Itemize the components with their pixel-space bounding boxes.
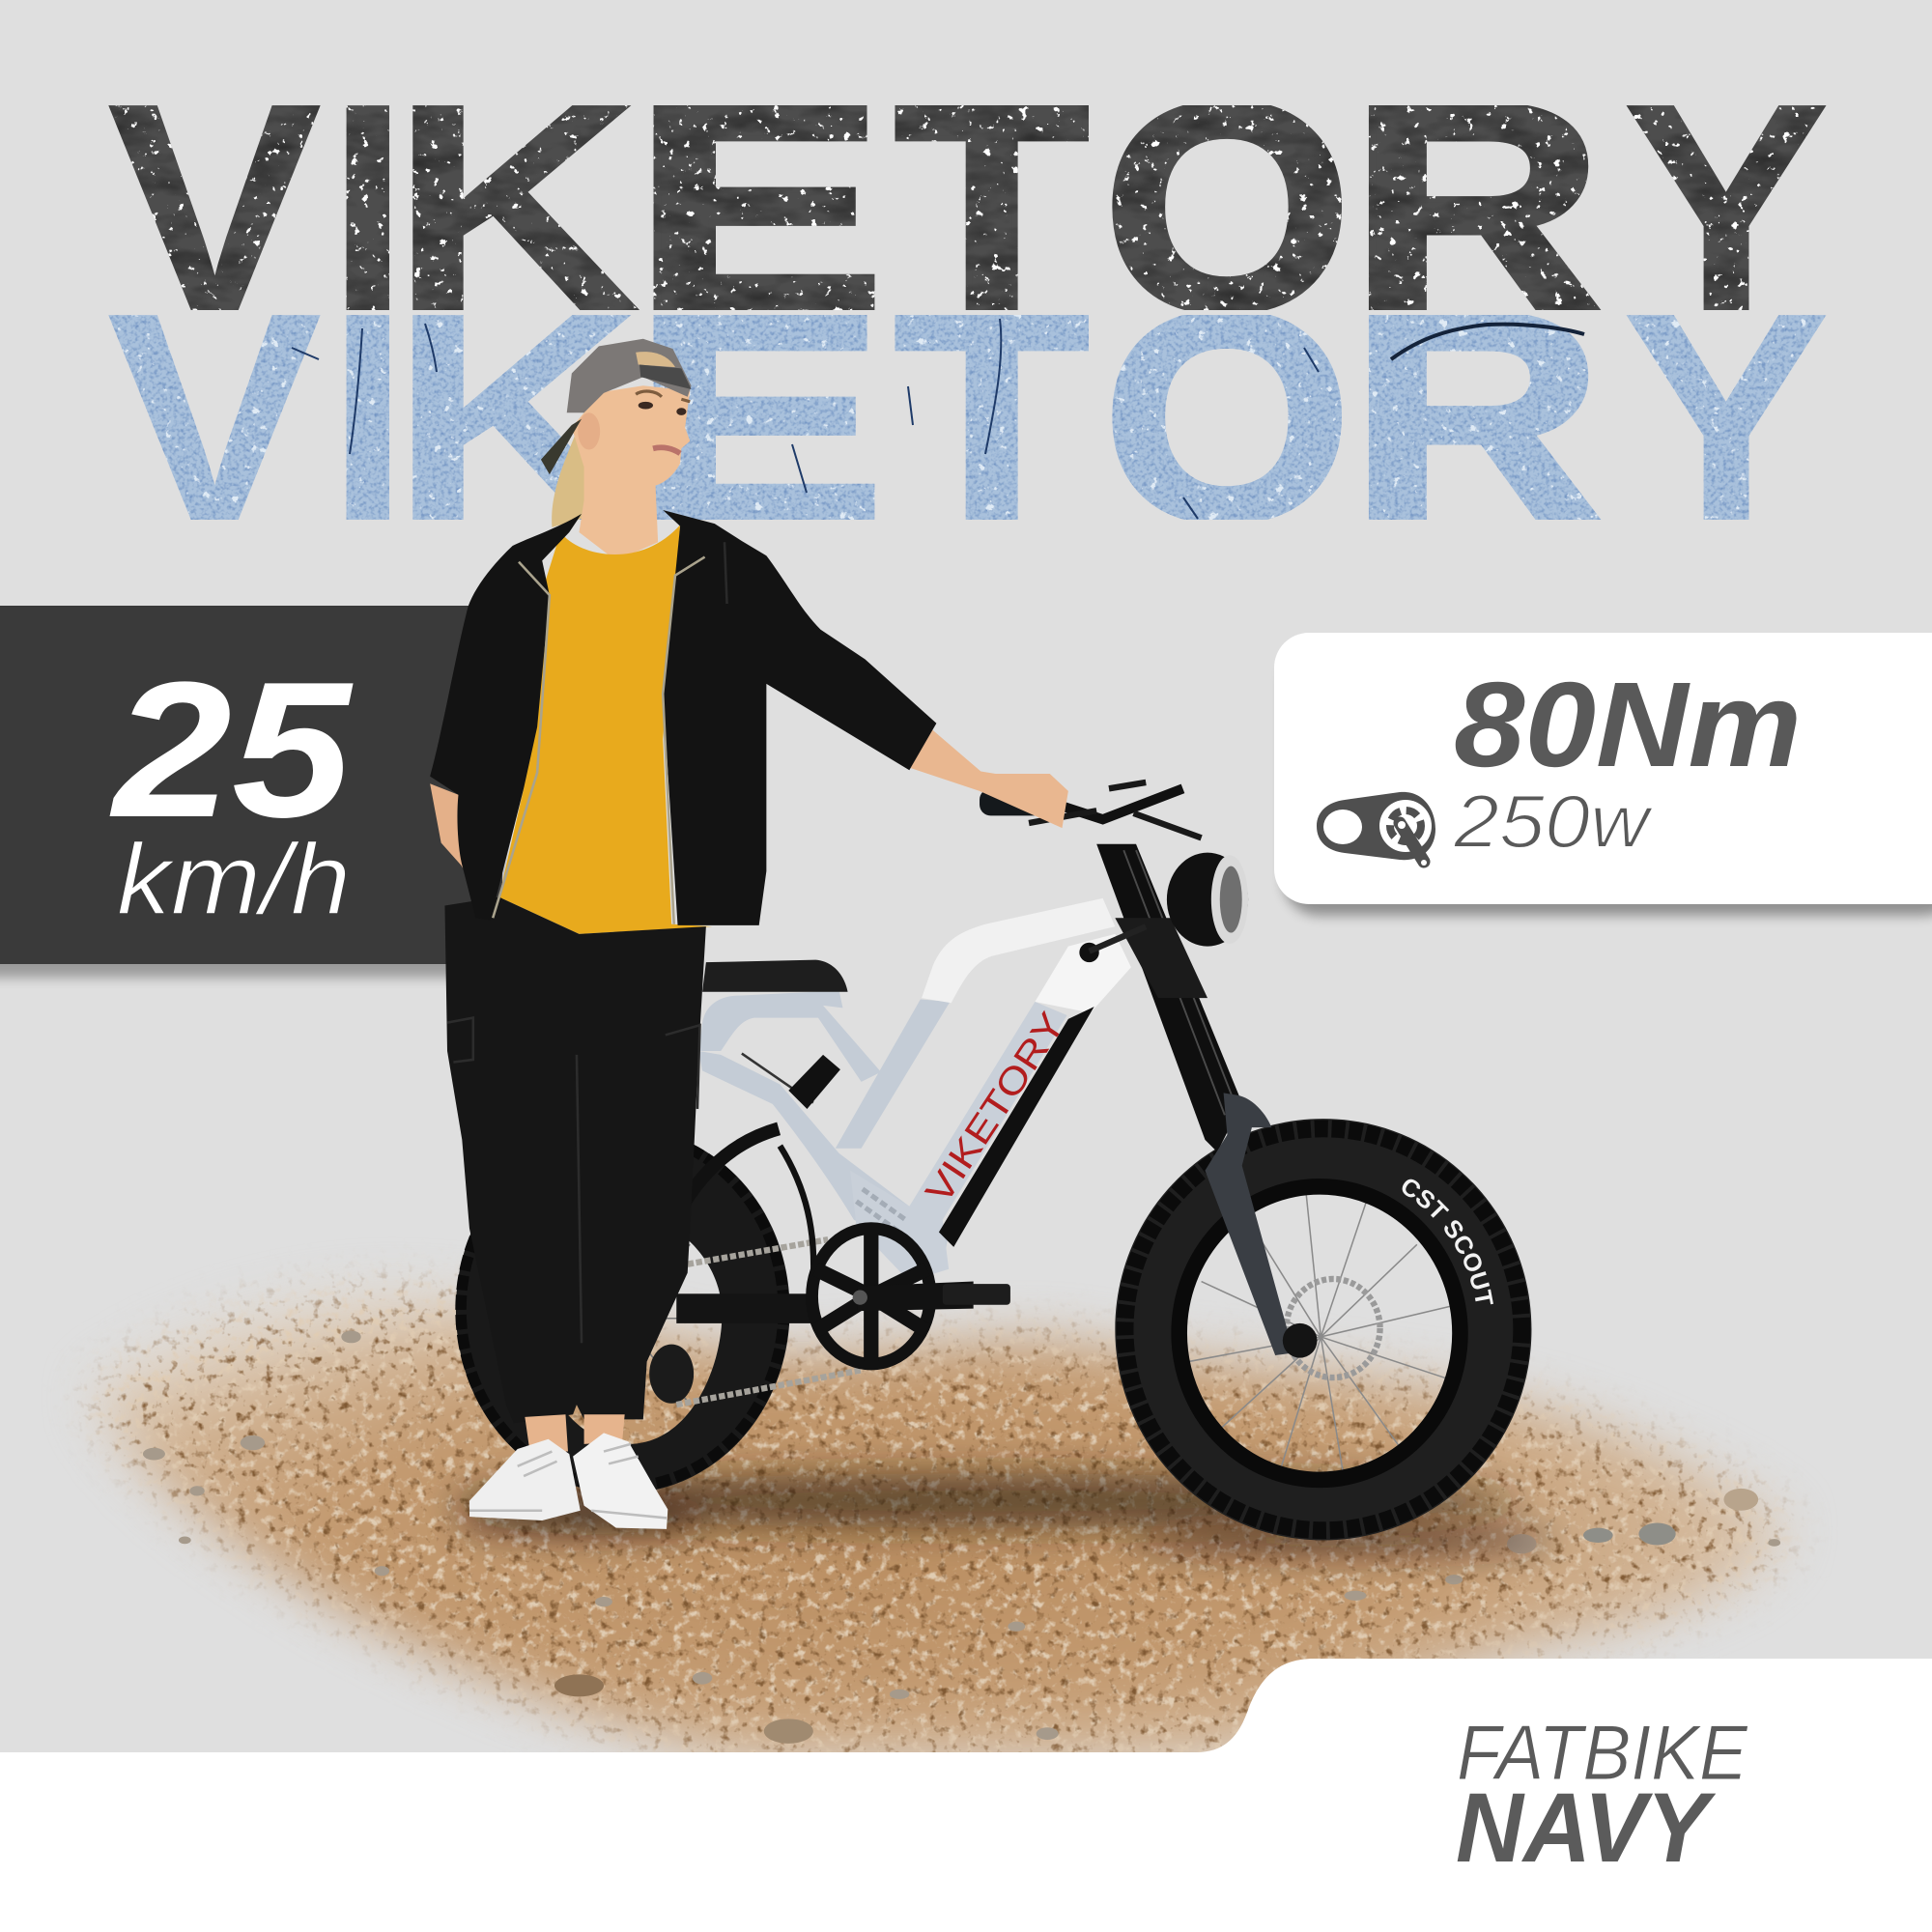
- left shoe: [469, 1439, 581, 1520]
- forearm and hand: [909, 727, 1068, 828]
- title: dark distressed wordmark: V: [106, 42, 325, 374]
- title: dark distressed wordmark: I: [327, 42, 410, 374]
- cap: [567, 339, 692, 412]
- title: dark distressed wordmark: Q: [1102, 41, 1352, 373]
- hand in pocket: [430, 783, 472, 882]
- title: dark distressed wordmark: R: [1349, 42, 1605, 374]
- saddle: [702, 960, 848, 992]
- trousers: [444, 897, 706, 1423]
- bike: handlebar: [980, 782, 1202, 838]
- title: dark distressed wordmark: T: [895, 41, 1089, 374]
- spokes: [1189, 1193, 1452, 1472]
- title: blue cracked wordmark: [108, 315, 1826, 520]
- title: blue cracked wordmark: Q: [1102, 250, 1352, 582]
- frame lower section: [698, 1051, 949, 1267]
- tyre lettering: [1399, 1190, 1477, 1314]
- title: blue cracked wordmark: E: [632, 250, 886, 582]
- speed unit: km/h: [117, 824, 351, 936]
- jacket right panel: [663, 510, 936, 925]
- ponytail: [552, 425, 594, 527]
- bike: chainring and crank: [676, 1229, 1010, 1364]
- title: dark distressed wordmark: Y: [1621, 42, 1832, 374]
- bike: frame: [698, 898, 1131, 1282]
- brake disc: [1287, 1279, 1380, 1378]
- hood string: [724, 542, 727, 604]
- model name: NAVY: [1456, 1773, 1717, 1883]
- ankles: [525, 1414, 625, 1452]
- right shoe: [573, 1433, 668, 1529]
- shock: [742, 1054, 813, 1103]
- title: blue cracked wordmark: V: [106, 251, 325, 583]
- scene: rider and bike: [66, 338, 1814, 1752]
- bike: rear fender: [685, 1128, 779, 1202]
- icon: mid-drive crank motor: [1317, 792, 1435, 866]
- frame white head section: [1035, 934, 1131, 1012]
- title: dark distressed wordmark: [108, 105, 1826, 310]
- title: dark distressed wordmark: K: [389, 42, 642, 374]
- pebbles: [143, 1331, 1780, 1744]
- speed value: 25: [109, 642, 354, 858]
- ground shadow: [456, 1474, 1552, 1552]
- rear wheel: [456, 1127, 790, 1493]
- title: blue cracked wordmark: T: [895, 250, 1089, 583]
- brand on frame: VIKETORY: [918, 1006, 1073, 1211]
- title: blue cracked wordmark: Y: [1621, 251, 1832, 583]
- vent slots: [856, 1189, 905, 1233]
- torque value: 80Nm: [1454, 658, 1802, 792]
- power value: 250w: [1453, 779, 1654, 864]
- zipper: [493, 557, 705, 924]
- product line: FATBIKE: [1457, 1710, 1748, 1797]
- bike: front wheel: CST SCOUT: [1403, 1179, 1493, 1304]
- title: dark distressed wordmark: E: [632, 41, 886, 373]
- panel: bottom white band: [0, 1659, 1932, 1932]
- shoe details: [469, 1444, 667, 1518]
- bike: chain: [676, 1239, 862, 1405]
- frame white upper tube: [922, 898, 1115, 1003]
- seat support: [698, 991, 881, 1082]
- rider: [430, 339, 1068, 1529]
- panel: torque and power card: [1274, 633, 1932, 916]
- title: blue cracked wordmark: R: [1349, 251, 1605, 583]
- rim: [1179, 1186, 1460, 1480]
- neck and face: [572, 385, 690, 560]
- eyes, brows and mouth: [636, 391, 690, 402]
- jacket left panel: [430, 514, 582, 921]
- trouser pockets: [447, 1018, 699, 1343]
- yellow tee: [499, 525, 712, 934]
- bike: headlight: [1167, 853, 1248, 947]
- bike: front wheel: [1115, 1119, 1532, 1540]
- title: blue cracked wordmark: K: [389, 251, 642, 583]
- title: blue cracked wordmark: I: [327, 251, 410, 583]
- bike: fork and head tube: [1079, 844, 1318, 1358]
- battery: [939, 1007, 1094, 1247]
- ear: [578, 412, 600, 450]
- ground: dirt patch: [93, 1295, 1786, 1762]
- panel: speed: [0, 606, 502, 978]
- tyre: [1115, 1119, 1531, 1540]
